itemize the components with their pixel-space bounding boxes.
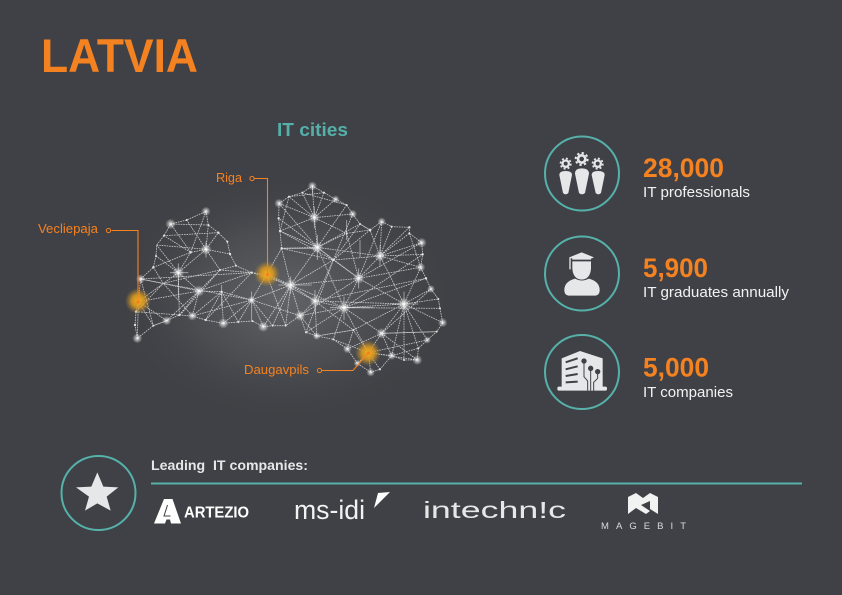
city marker: Vecliepaja xyxy=(38,222,151,314)
stat: IT graduates xyxy=(545,236,790,310)
logo: Artezio: ARTEZIO xyxy=(184,504,249,522)
logo: Artezio xyxy=(154,499,249,524)
logo: Magebit xyxy=(601,493,686,532)
city marker: Vecliepaja: Vecliepaja xyxy=(38,222,98,236)
logo: ms-idi: ms-idi xyxy=(294,495,365,525)
logo: intechnic: intechn!c xyxy=(423,497,566,523)
icon: building xyxy=(545,335,619,409)
stat: IT graduates: 5,900 xyxy=(643,253,708,283)
icon: star xyxy=(62,456,136,530)
city marker: Daugavpils xyxy=(244,340,381,377)
stat: IT graduates: IT graduates annually xyxy=(643,285,790,301)
icon: professionals xyxy=(545,136,619,210)
stat: IT professionals: IT professionals xyxy=(643,185,750,201)
map: Latvia network xyxy=(132,181,447,377)
stat: IT professionals: 28,000 xyxy=(643,153,724,183)
city marker: Riga: Riga xyxy=(216,171,242,185)
title: LATVIA xyxy=(41,29,198,82)
stat: IT professionals xyxy=(545,136,750,210)
city marker: Daugavpils: Daugavpils xyxy=(244,363,309,377)
logo: Magebit: MAGEBIT xyxy=(601,521,686,532)
stat: IT companies xyxy=(545,335,733,409)
city marker: Riga xyxy=(216,171,280,287)
stat: IT companies: IT companies xyxy=(643,385,733,401)
heading: Leading IT companies: Leading IT companies: xyxy=(151,458,308,473)
icon: graduate xyxy=(545,236,619,310)
logo: ms-idi xyxy=(294,492,390,525)
heading: IT cities: IT cities xyxy=(277,120,348,140)
stat: IT companies: 5,000 xyxy=(643,352,709,382)
